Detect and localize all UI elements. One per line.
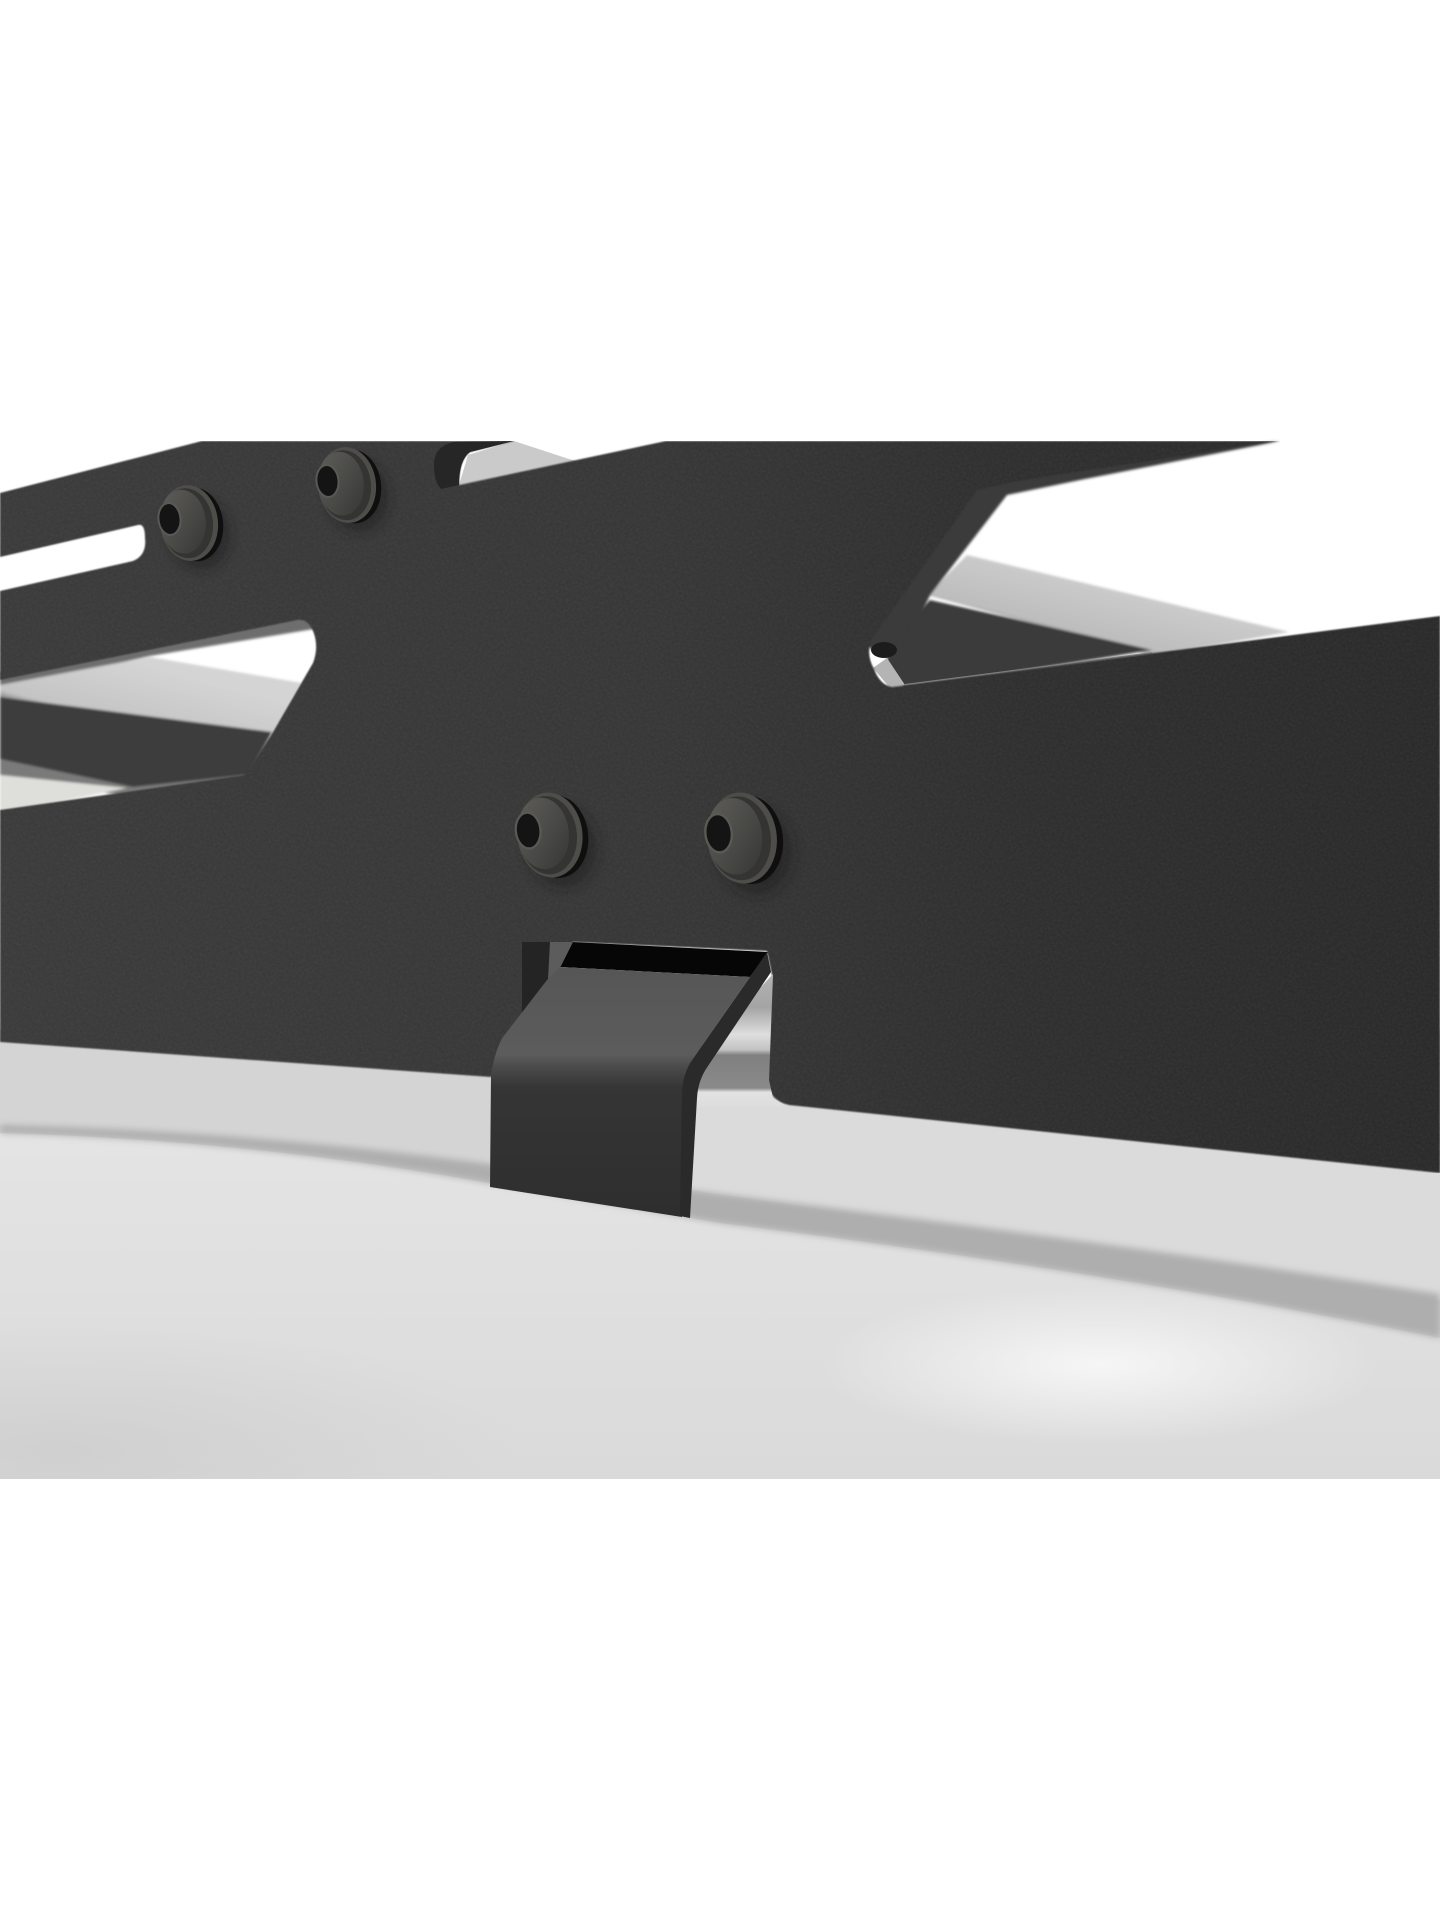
plate thickness rim xyxy=(0,612,320,690)
crossbar seen through right notch xyxy=(885,555,1289,689)
view of roof through gap xyxy=(692,974,786,1108)
shelf strip under plate xyxy=(0,1030,1440,1360)
roof and rail background xyxy=(0,1030,1440,1920)
slot opening behind tab xyxy=(522,942,786,1108)
folded clamp tab xyxy=(490,952,771,1218)
screw lower left xyxy=(512,788,600,892)
top notch inner shading xyxy=(434,441,514,489)
left inner wall xyxy=(522,942,550,1014)
roof highlight xyxy=(820,1285,1380,1445)
lower grey stripe xyxy=(0,759,246,795)
right notch dark corner xyxy=(871,642,897,658)
notch edge glint xyxy=(905,653,1152,685)
crossbar seen through top notch xyxy=(459,441,580,485)
left inner wall highlight xyxy=(548,942,573,980)
brighter shelf patch right xyxy=(690,1095,1440,1300)
tab right thickness xyxy=(680,952,771,1218)
mounting plate xyxy=(0,441,1440,1173)
photo bottom mask xyxy=(0,1479,1440,1920)
roof lower-left shade xyxy=(0,1320,520,1580)
brighter shelf patch left xyxy=(0,1040,491,1165)
black gap xyxy=(560,942,768,977)
crossbar shadow face xyxy=(0,697,272,795)
crossbar seen through left cutout xyxy=(0,612,320,814)
bright gap xyxy=(0,775,127,814)
right notch thickness rim xyxy=(858,441,1280,655)
roof panel xyxy=(0,1133,1440,1479)
screw top left xyxy=(155,481,234,574)
screw top centre xyxy=(313,443,392,536)
rail channel shadow xyxy=(0,1125,1440,1338)
screw lower right xyxy=(701,788,796,899)
crossbar lit face xyxy=(0,657,302,735)
